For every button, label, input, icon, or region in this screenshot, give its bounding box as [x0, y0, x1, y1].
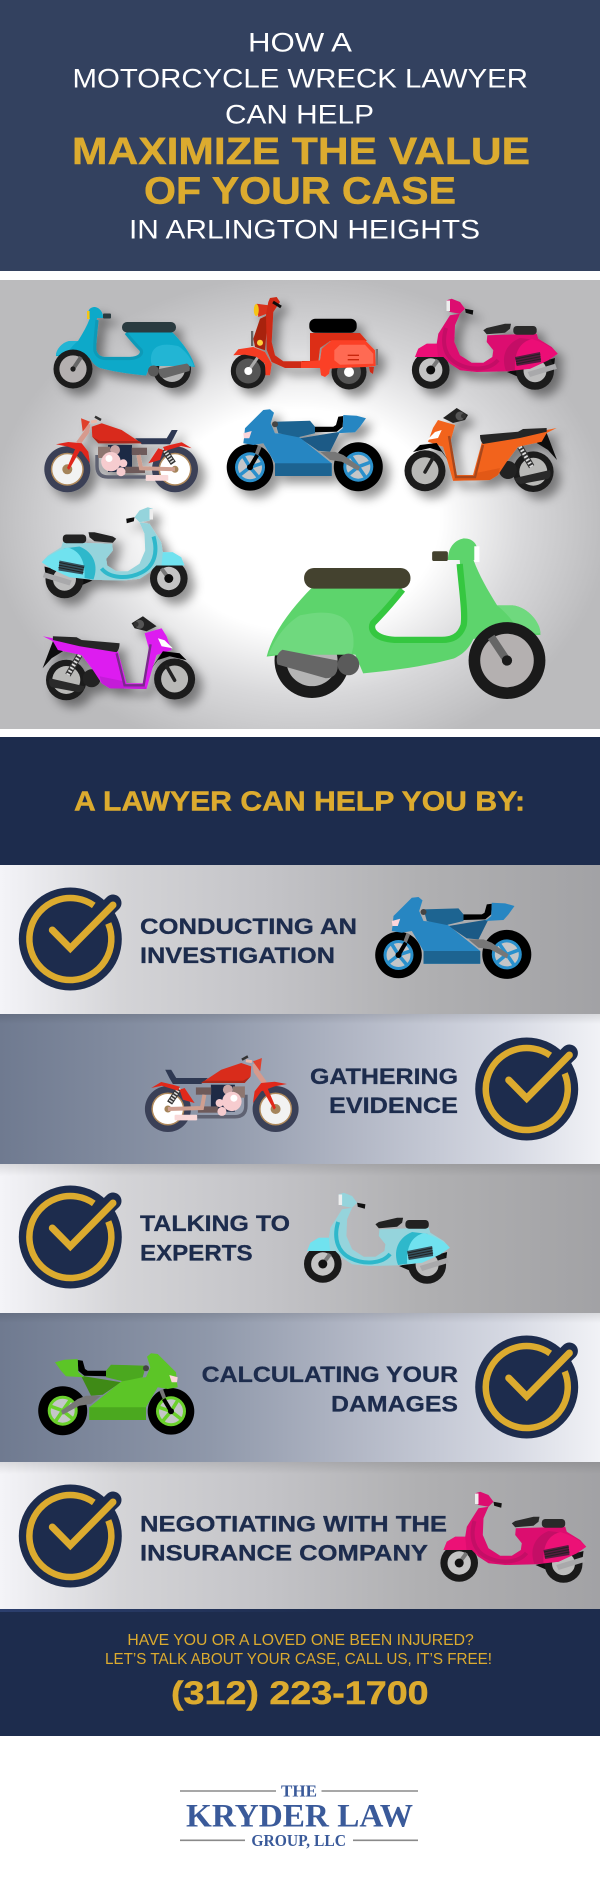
label: negotiating with the insurance company [140, 1512, 447, 1566]
icon: light blue scooter [304, 1193, 450, 1284]
label: calculating your damages: DAMAGES [331, 1392, 458, 1417]
title line: Can Help: CAN HELP [225, 100, 374, 130]
label: negotiating with the insurance company: INSURANCE COMPANY [140, 1541, 428, 1566]
logo: The Kryder Law Group, LLC: KRYDER LAW [186, 1799, 413, 1835]
label: gathering evidence [310, 1064, 458, 1118]
icon: check mark [19, 1484, 122, 1588]
icon: red scooter [231, 297, 378, 390]
call to action band [0, 1609, 600, 1736]
label: negotiating with the insurance company: NEGOTIATING WITH THE [140, 1512, 447, 1537]
call to action text: LET’S TALK ABOUT YOUR CASE, CALL US, IT’S FREE! [105, 1651, 492, 1668]
logo: The Kryder Law Group, LLC: GROUP, LLC [251, 1831, 346, 1850]
label: conducting an investigation [140, 914, 357, 968]
row: conducting an investigation [0, 865, 600, 1014]
row: gathering evidence [0, 1014, 600, 1164]
title line: In Arlington Heights: IN ARLINGTON HEIGHTS [129, 214, 480, 244]
icon: pink scooter [412, 299, 558, 390]
logo: The Kryder Law Group, LLC: THE [281, 1782, 317, 1801]
icon: light blue scooter [42, 507, 188, 598]
title highlight: Maximize the Value: MAXIMIZE THE VALUE [72, 130, 530, 172]
label: conducting an investigation: INVESTIGATION [140, 943, 335, 968]
row: talking to experts [0, 1164, 600, 1313]
label: gathering evidence: GATHERING [310, 1064, 458, 1089]
label: talking to experts: TALKING TO [140, 1211, 290, 1236]
panel: motorcycle collection [0, 280, 600, 729]
title line: Motorcycle Wreck Lawyer: MOTORCYCLE WRECK LAWYER [72, 64, 528, 94]
label: calculating your damages: CALCULATING YOUR [202, 1362, 458, 1387]
label: gathering evidence: EVIDENCE [329, 1093, 458, 1118]
icon: check mark [19, 888, 122, 990]
icon: orange scooter [404, 408, 557, 492]
heading: A lawyer can help you by: A LAWYER CAN HELP YOU BY: [74, 786, 525, 817]
title line: How a: HOW A [248, 28, 352, 58]
title banner [0, 0, 600, 271]
label: talking to experts [140, 1211, 290, 1266]
row: calculating your damages [0, 1313, 600, 1462]
label: talking to experts: EXPERTS [140, 1241, 253, 1266]
icon: blue sport bike [227, 409, 383, 491]
phone number: (312) 223-1700 [171, 1675, 429, 1711]
icon: large green scooter [267, 538, 545, 699]
icon: pink scooter [440, 1492, 586, 1583]
icon: check mark [475, 1038, 578, 1140]
title highlight: of Your Case: OF YOUR CASE [144, 170, 456, 212]
label: conducting an investigation: CONDUCTING AN [140, 914, 357, 939]
icon: magenta scooter [43, 616, 195, 700]
icon: check mark [19, 1186, 122, 1288]
icon: red cafe racer [145, 1056, 299, 1132]
logo: The Kryder Law Group, LLC [180, 1782, 418, 1850]
icon: red cafe racer [44, 417, 198, 492]
icon: check mark [475, 1336, 578, 1438]
label: calculating your damages [202, 1362, 458, 1417]
icon: cyan scooter [54, 307, 195, 388]
section heading band [0, 737, 600, 865]
row: negotiating with the insurance company [0, 1462, 600, 1609]
icon: green sport bike [38, 1353, 194, 1435]
call to action text: HAVE YOU OR A LOVED ONE BEEN INJURED? [127, 1632, 474, 1649]
icon: blue sport bike [375, 897, 531, 979]
call to action text [105, 1632, 492, 1668]
